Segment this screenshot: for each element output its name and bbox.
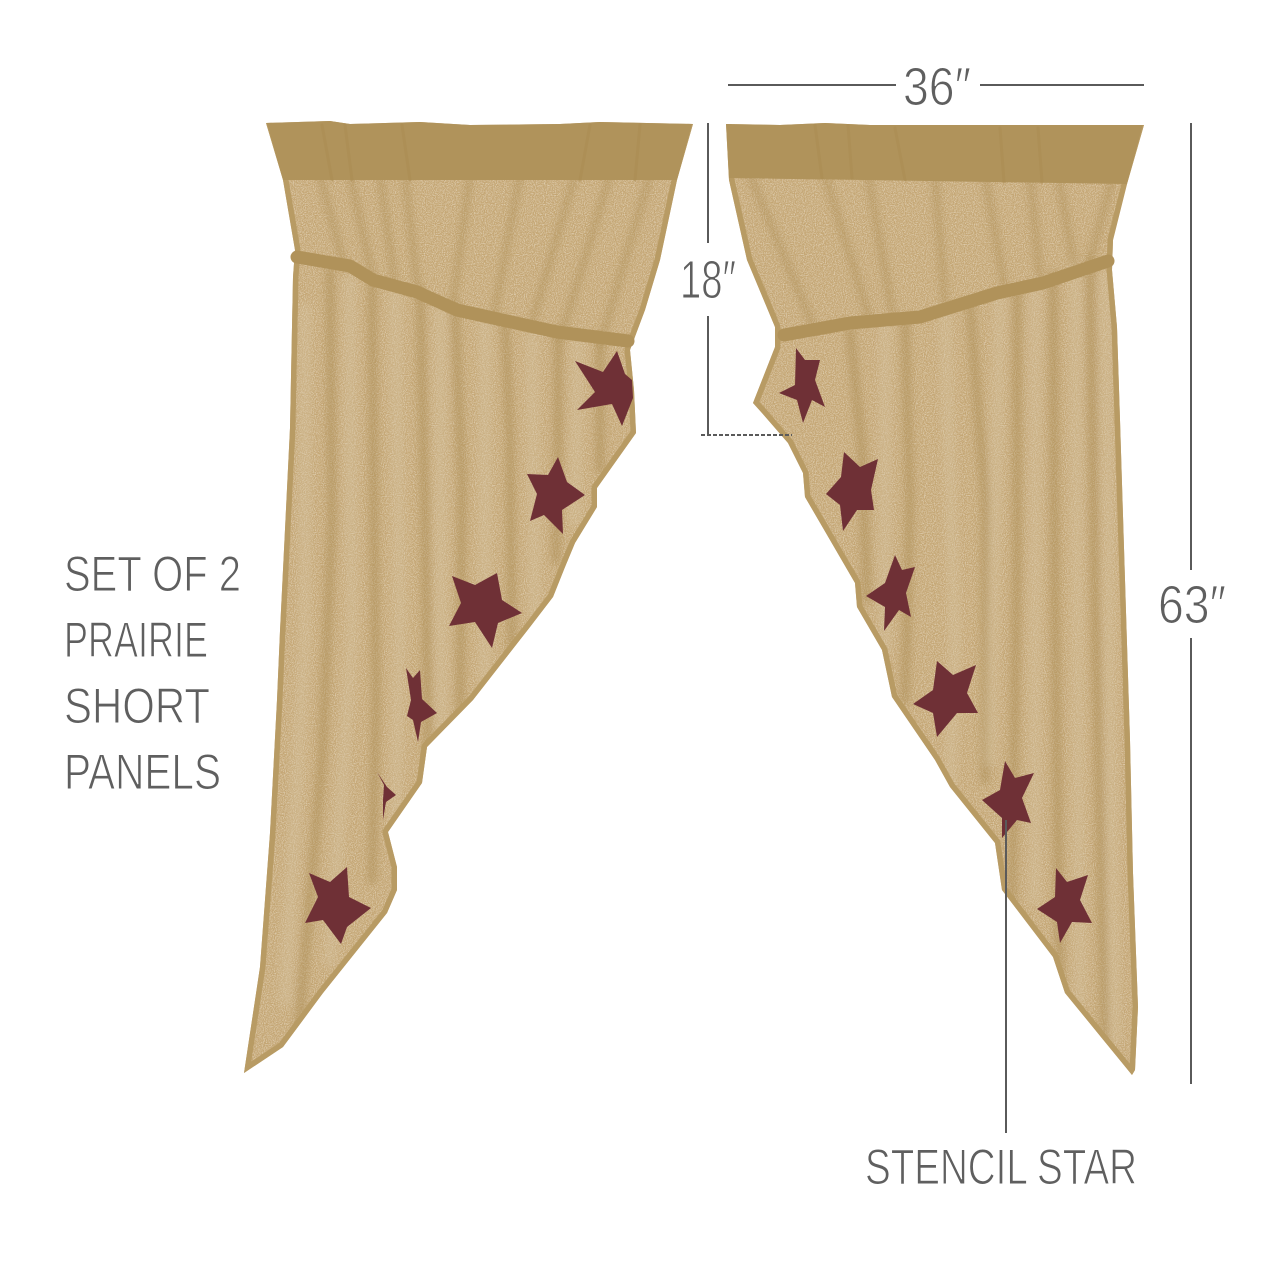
title text: set of 2 prairie short panels: PANELS	[64, 744, 221, 800]
left gathered tie band	[297, 257, 628, 341]
tie-back dimension 18 inches: 18″	[680, 250, 736, 310]
right header band	[726, 120, 1144, 184]
left header band	[266, 120, 693, 180]
title text: set of 2 prairie short panels: SHORT	[64, 678, 210, 734]
height dimension 63 inches: 63″	[1158, 575, 1226, 635]
left curtain edge hem	[244, 123, 693, 1073]
title text: set of 2 prairie short panels: PRAIRIE	[64, 612, 208, 668]
right stars	[779, 348, 1092, 943]
right curtain edge hem	[726, 124, 1144, 1075]
right curtain panel	[720, 120, 1150, 1080]
left stars	[305, 351, 633, 944]
right gathered tie band	[784, 261, 1108, 335]
left curtain panel	[240, 120, 700, 1080]
callout: stencil star: STENCIL STAR	[865, 1139, 1137, 1195]
title text: set of 2 prairie short panels: SET OF 2	[64, 546, 241, 602]
title text: set of 2 prairie short panels	[64, 546, 241, 800]
width dimension 36 inches: 36″	[903, 57, 971, 117]
